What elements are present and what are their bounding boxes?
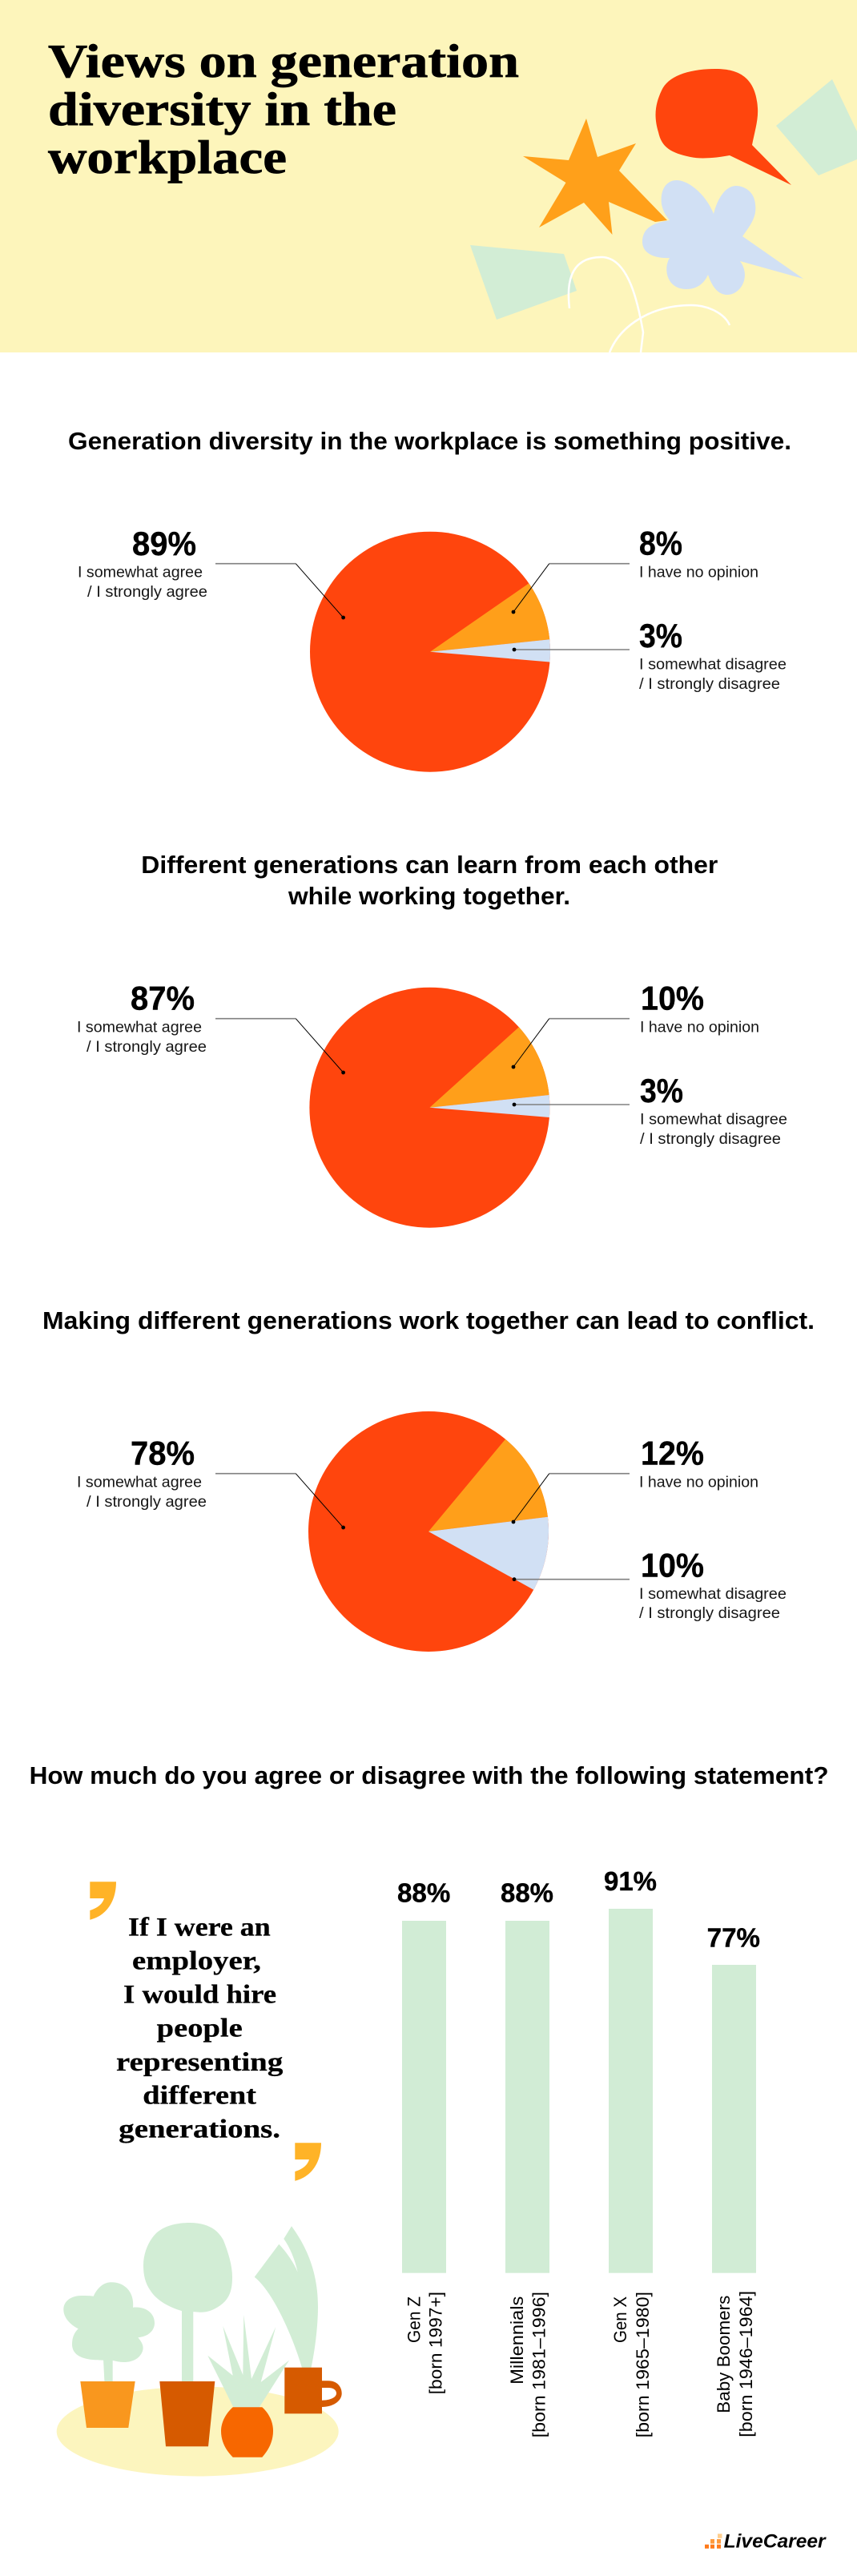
logo: LiveCareer: LiveCareer [724,2531,827,2553]
bar: Gen X: 91% [604,1866,657,1896]
leader lines [215,1474,630,1581]
label: 10 percent disagree: / I strongly disagree [639,1604,780,1622]
label: 10 percent disagree: I somewhat disagree [639,1585,787,1603]
label: 12 percent no opinion [639,1434,758,1491]
label: 3 percent disagree [639,617,787,693]
label: 3 percent disagree: / I strongly disagree [640,1130,781,1148]
bar: Gen X [604,1866,657,2437]
label: 87 percent agree [77,979,207,1056]
title: diversity in the [48,83,396,135]
label: 89 percent agree [78,525,207,601]
label: 10 percent disagree [639,1546,787,1622]
bar: Gen X: [born 1965–1980] [633,2292,653,2437]
heading: while working together. [288,882,570,910]
bar: Millennials: Millennials [507,2296,527,2385]
label: 8 percent no opinion: I have no opinion [639,564,758,582]
illustration: plants and mug [57,2223,342,2477]
label: 78 percent agree: 78% [131,1434,195,1472]
label: 10 percent no opinion: 10% [641,979,704,1017]
heading: How much do you agree or disagree with the following statement? [30,1761,829,1789]
panel: header [0,0,857,352]
heading: Different generations can learn from each other [141,851,718,879]
label: 3 percent disagree: 3% [640,1072,683,1109]
bar: Gen Z [397,1878,450,2394]
label: 8 percent no opinion: 8% [639,525,682,562]
mug [284,2368,342,2413]
pie chart [308,1411,549,1652]
label: 12 percent no opinion: I have no opinion [639,1474,758,1491]
pot 2 [159,2381,215,2446]
label: 89 percent agree: / I strongly agree [87,583,207,601]
label: 89 percent agree: I somewhat agree [78,564,203,582]
bar: Millennials: [born 1981–1996] [529,2292,549,2437]
label: 3 percent disagree: I somewhat disagree [639,656,787,674]
pot 1 [80,2381,135,2428]
bar: Millennials [501,1878,553,2437]
label: 87 percent agree: 87% [131,979,195,1017]
quote text: If I were an [128,1914,271,1942]
label: 89 percent agree: 89% [132,525,196,562]
big leaf [255,2226,318,2369]
quote text [116,1914,284,2143]
plant 1 [63,2282,155,2383]
pie chart [309,988,549,1228]
heading: Generation diversity in the workplace is something positive. [68,427,791,455]
vase [221,2407,273,2457]
bar: Gen Z: Gen Z [404,2296,424,2343]
label: 8 percent no opinion [639,525,758,582]
heading [141,851,718,910]
bar: Gen X: Gen X [610,2296,630,2343]
panel: learning from each other [77,851,787,1228]
icon: opening quote mark [90,1882,116,1920]
icon: red speech bubble [656,69,791,185]
bar: Baby Boomers: [born 1946–1964] [736,2291,756,2437]
leader lines [215,564,630,651]
label: 3 percent disagree: 3% [639,617,682,654]
label: 78 percent agree: / I strongly agree [87,1493,207,1511]
bar: Baby Boomers: 77% [707,1923,760,1953]
pie chart [310,532,550,772]
title: workplace [48,131,287,183]
table ellipse [57,2387,339,2477]
label: 87 percent agree: I somewhat agree [77,1019,202,1036]
icon: orange star [523,119,667,235]
bar: Millennials: 88% [501,1878,553,1907]
panel: conflict [42,1306,815,1652]
bar chart [397,1866,760,2437]
label: 78 percent agree [77,1434,207,1511]
panel: positive view [68,427,791,772]
panel: hiring statement [30,1761,829,2477]
quote text: people [157,2015,243,2043]
bar: Gen Z: [born 1997+] [426,2292,445,2394]
label: 3 percent disagree: I somewhat disagree [640,1111,787,1129]
icon: green quadrilateral [470,245,577,320]
label: 87 percent agree: / I strongly agree [87,1038,207,1056]
quote text: generations. [119,2115,280,2143]
label: 3 percent disagree [640,1072,787,1148]
icon: white curves [569,257,730,352]
label: 78 percent agree: I somewhat agree [77,1474,202,1491]
header background [0,0,857,352]
leader lines [215,1019,630,1106]
heading: Making different generations work together can lead to conflict. [42,1306,815,1334]
bar: Gen Z: 88% [397,1878,450,1907]
label: 10 percent disagree: 10% [641,1546,704,1584]
icon: blue flower bubble [642,180,803,295]
label: 3 percent disagree: / I strongly disagree [639,675,780,693]
quote text: different [143,2082,256,2111]
label: 12 percent no opinion: 12% [641,1434,704,1472]
bar: Baby Boomers [707,1923,760,2437]
label: 10 percent no opinion: I have no opinion [640,1019,759,1036]
quote text: I would hire [123,1981,276,2010]
icon: closing quote mark [295,2143,321,2181]
label: 10 percent no opinion [640,979,759,1036]
quote text: employer, [132,1946,261,1975]
plant 2 [143,2223,232,2383]
title [48,34,519,183]
plant 3 spiky [207,2315,289,2408]
title: Views on generation [48,34,519,87]
icon: green shape right [776,79,857,175]
quote text: representing [116,2048,284,2077]
bar: Baby Boomers: Baby Boomers [714,2296,734,2413]
